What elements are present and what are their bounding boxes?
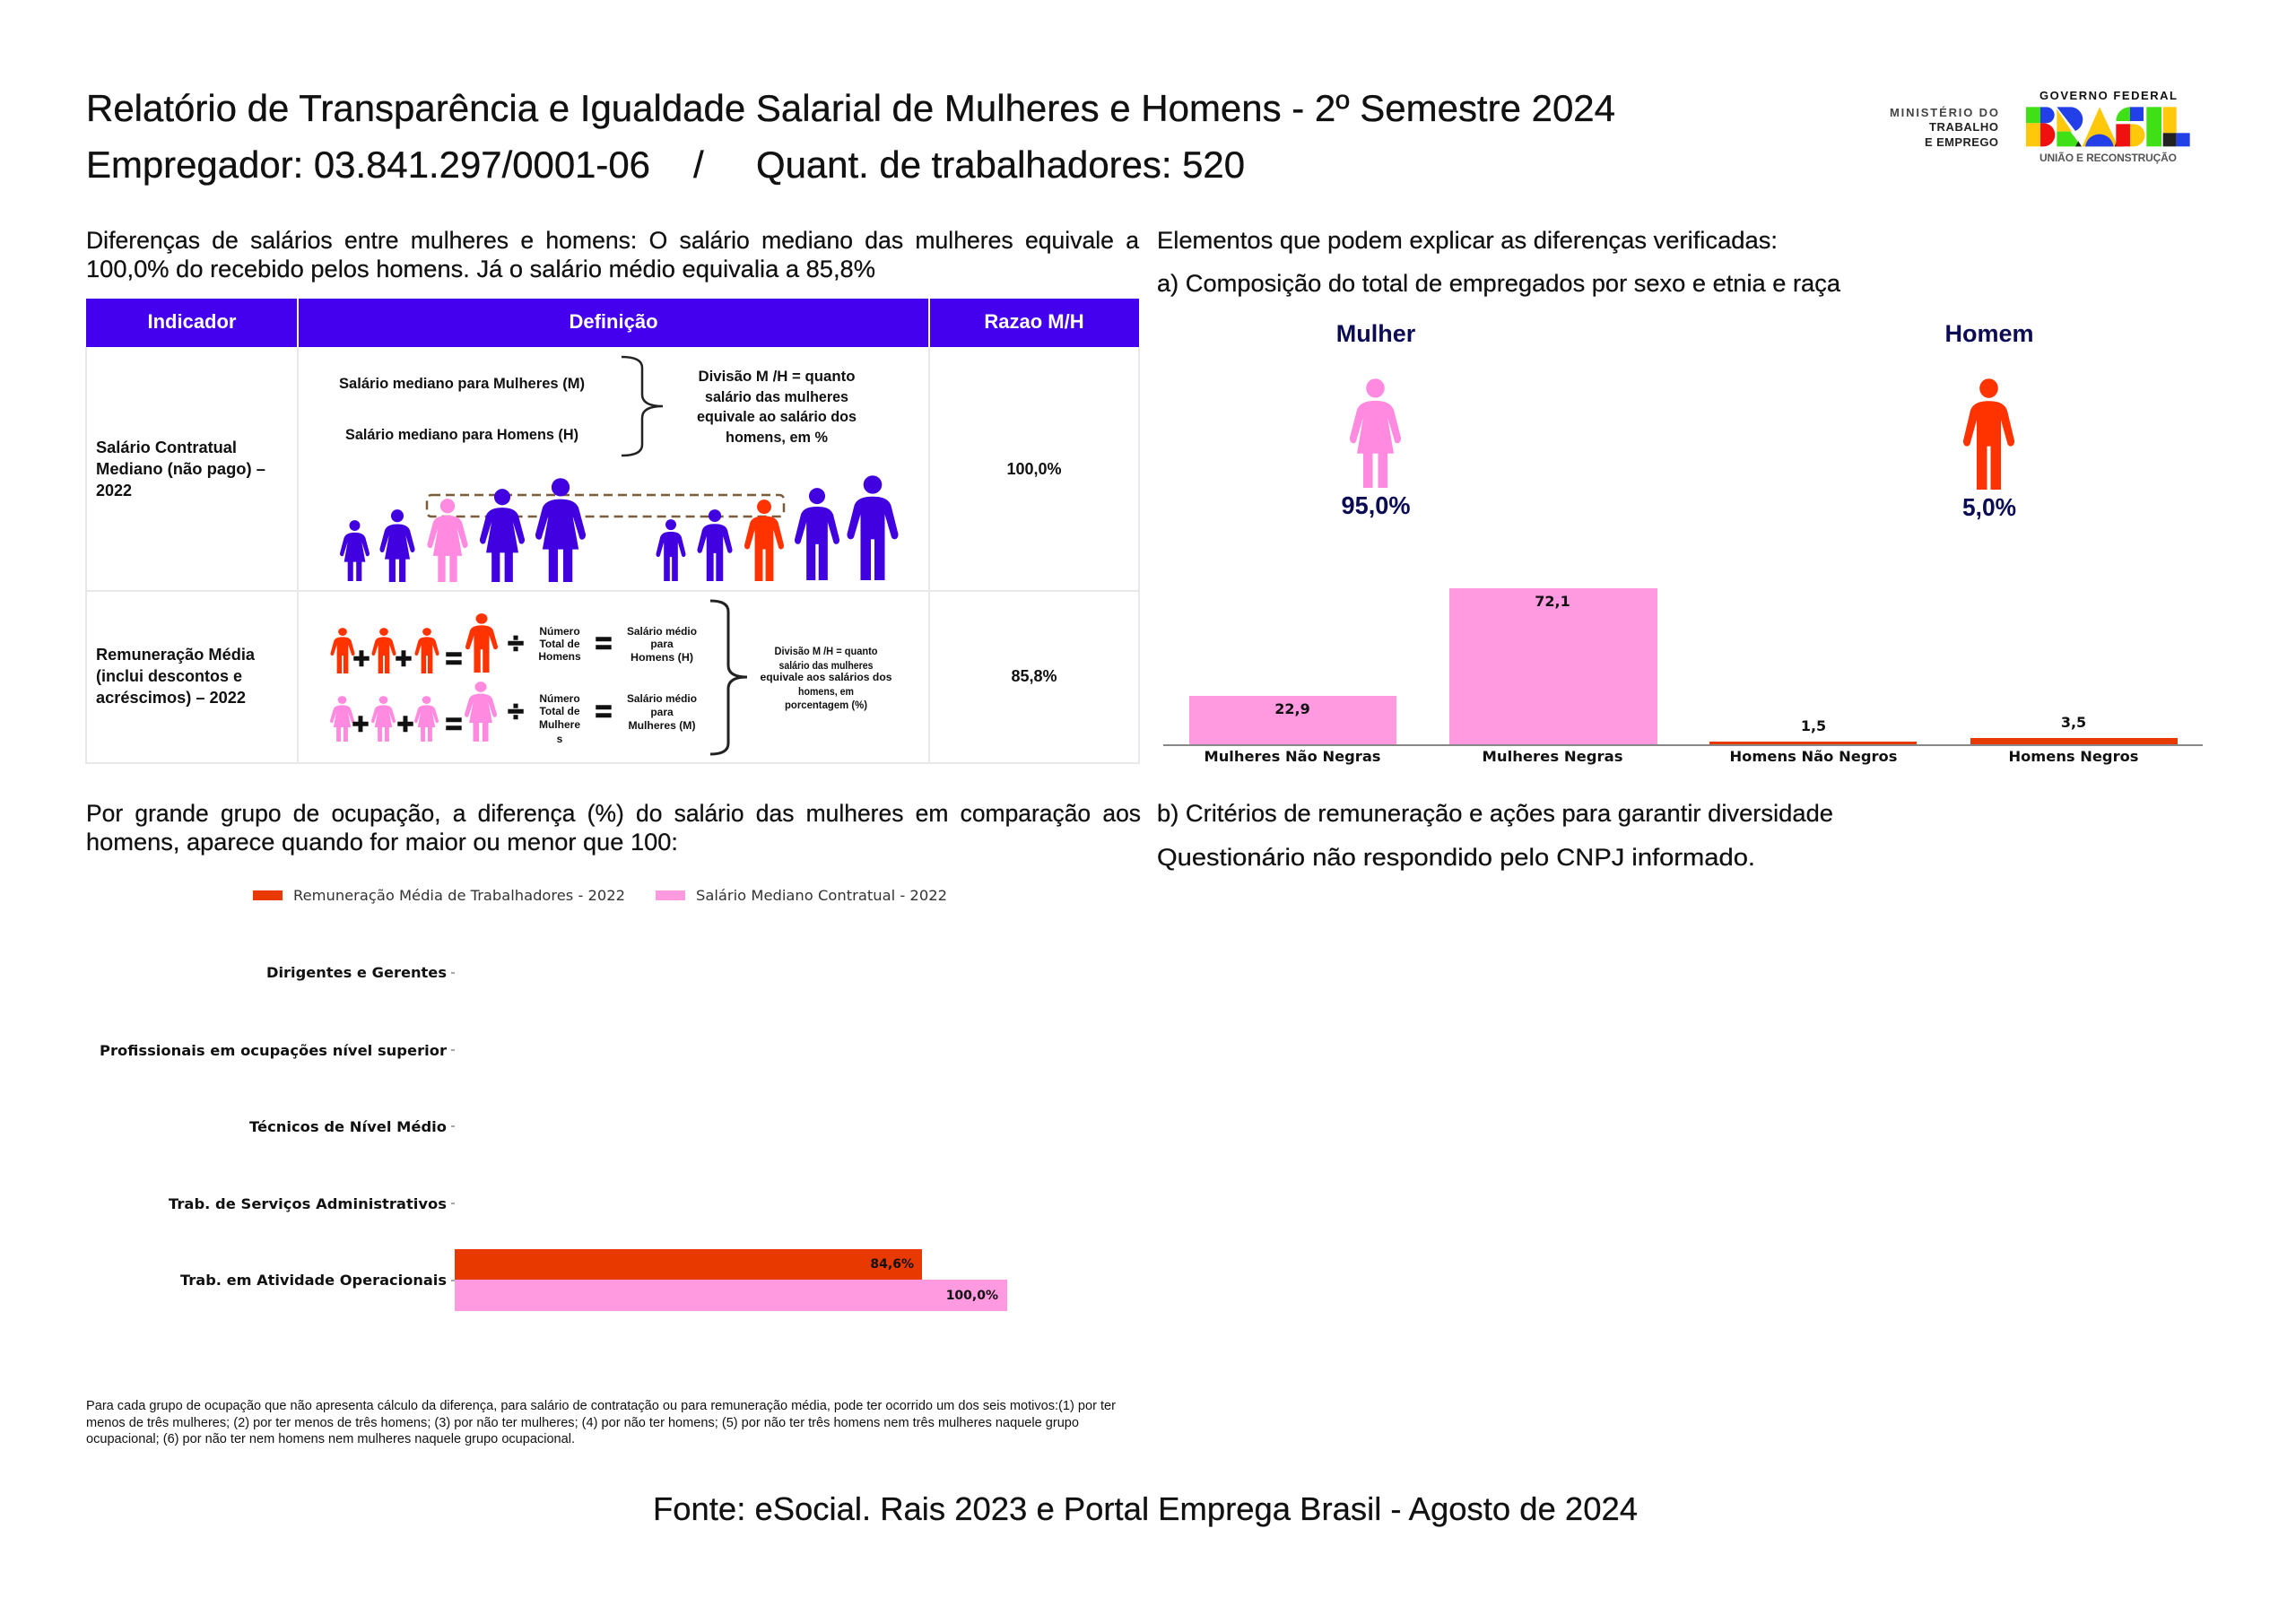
brace: average	[710, 601, 747, 754]
bar: mulheres não negras: 22,9	[1274, 700, 1310, 717]
ministry text: E EMPREGO	[1925, 135, 1998, 149]
legend: Remuneração Média de Trabalhadores - 2022	[293, 887, 625, 904]
brasil wordmark	[2026, 107, 2190, 146]
bar: salário mediano: 100,0%	[946, 1289, 998, 1303]
governo federal text: GOVERNO FEDERAL	[2039, 89, 2177, 102]
row label: remuneração média: acréscimos) – 2022	[96, 689, 246, 707]
bar: remuneração média: 84,6%	[870, 1257, 914, 1272]
ministry text: TRABALHO	[1929, 120, 1998, 134]
equation: women average: para	[650, 706, 674, 718]
equation: men average: Total de	[539, 638, 580, 650]
value: woman share: 95,0%	[1342, 491, 1411, 519]
equation: men average	[330, 613, 697, 674]
equation: women average: =	[446, 708, 462, 740]
definition: median division	[697, 368, 857, 446]
table header: Razao M/H	[984, 310, 1084, 333]
equation: men average: Homens	[538, 650, 581, 663]
equation: women average: Total de	[539, 705, 580, 717]
source: Fonte: eSocial. Rais 2023 e Portal Emprega Brasil - Agosto de 2024	[653, 1490, 1638, 1527]
employer line	[86, 143, 1245, 186]
legend: Salário Mediano Contratual - 2022	[696, 887, 947, 904]
text: salary differences	[86, 227, 1140, 282]
bar: homens não negros: 1,5	[1801, 717, 1826, 734]
definition: average division	[761, 645, 892, 711]
axis labels: Homens Não Negros	[1729, 748, 1898, 765]
definition: median text	[339, 375, 585, 443]
text: salary differences: 100,0% do recebido pelos homens. Já o salário médio equivalia a 85,8%	[86, 256, 875, 282]
equation: men average: ÷	[508, 627, 524, 659]
axis labels: Mulheres Negras	[1482, 748, 1623, 765]
equation: men average: Número	[539, 625, 580, 638]
icons: women by salary	[340, 478, 586, 582]
equation: men average: +	[396, 642, 412, 674]
category labels: Trab. em Atividade Operacionais	[180, 1272, 447, 1289]
brace: median	[622, 357, 663, 456]
definition: average division: Divisão M /H = quanto	[775, 645, 877, 657]
definition: median text: Salário mediano para Mulheres (M)	[339, 375, 585, 392]
equation: men average: para	[650, 638, 674, 650]
bar: homens negros: 3,5	[2061, 714, 2086, 731]
label: homem: Homem	[1944, 320, 2034, 347]
value: average ratio: 85,8%	[1011, 667, 1057, 685]
panel: man share	[1944, 320, 2034, 521]
employer line: /	[693, 143, 704, 186]
bar: mulheres negras: 72,1	[1535, 593, 1570, 610]
logo: ministério do trabalho e governo federal	[1890, 89, 2190, 164]
legend	[253, 887, 947, 904]
text: salary differences: Diferenças de salários entre mulheres e homens: O salário mediano das mulheres equivale a	[86, 227, 1140, 254]
equation: women average	[330, 682, 697, 745]
equation: women average: +	[397, 708, 413, 740]
ministry text: MINISTÉRIO DO	[1890, 106, 1998, 119]
equation: men average: Homens (H)	[631, 651, 693, 664]
table header: Definição	[569, 310, 658, 333]
text: occupational group difference: Por grande grupo de ocupação, a diferença (%) do salário das mulheres em comparação aos	[86, 800, 1141, 827]
axis	[1163, 744, 2203, 746]
value: man share: 5,0%	[1962, 493, 2016, 521]
bar: homens não negros	[1709, 717, 1917, 745]
icon: man	[1963, 378, 2014, 490]
footnote	[86, 1398, 1116, 1446]
equation: men average: +	[353, 642, 370, 674]
bar: mulheres negras	[1449, 588, 1657, 745]
definition: median division: Divisão M /H = quanto	[698, 368, 856, 385]
row label: salário contratual mediano: 2022	[96, 482, 132, 499]
row label: remuneração média: Remuneração Média	[96, 646, 256, 664]
row label: salário contratual mediano: Salário Contratual	[96, 439, 237, 456]
text: occupational group difference: homens, aparece quando for maior ou menor que 100:	[86, 829, 678, 855]
panel: woman share	[1336, 320, 1416, 519]
definition: average division: equivale aos salários dos	[761, 671, 892, 683]
value: median ratio: 100,0%	[1006, 460, 1062, 478]
employer line: Quant. de trabalhadores: 520	[756, 143, 1245, 186]
median highlight box	[427, 495, 784, 517]
equation: women average: ÷	[508, 695, 524, 727]
row label: remuneração média: (inclui descontos e	[96, 667, 242, 685]
ministry text	[1890, 106, 1998, 149]
title: Relatório de Transparência e Igualdade Salarial de Mulheres e Homens - 2º Semestre 2024	[86, 87, 1615, 129]
heading: composition: a) Composição do total de empregados por sexo e etnia e raça	[1157, 270, 1841, 297]
bar: remuneração média	[455, 1249, 922, 1280]
category labels: Profissionais em ocupações nível superior	[100, 1042, 447, 1059]
equation: women average: Número	[539, 692, 580, 705]
equation: men average: =	[596, 627, 612, 659]
equation: women average: Mulheres (M)	[628, 719, 696, 732]
axis labels: Homens Negros	[2009, 748, 2138, 765]
employer line: Empregador: 03.841.297/0001-06	[86, 143, 650, 186]
equation: women average: =	[596, 695, 612, 727]
equation: women average: Mulhere	[539, 718, 580, 731]
footnote: menos de três mulheres; (2) por ter menos de três homens; (3) por não ter mulheres; (4) por não ter homens; (5) por não ter três homens nem três mulheres naquele grupo	[86, 1415, 1079, 1430]
row label: remuneração média	[96, 646, 256, 707]
definition: average division: homens, em	[798, 685, 854, 698]
definition: average division: porcentagem (%)	[785, 699, 867, 711]
footnote: Para cada grupo de ocupação que não apresenta cálculo da diferença, para salário de contratação ou para remuneração média, pode ter ocorrido um dos seis motivos:(1) por ter	[86, 1398, 1116, 1413]
bar chart: composition by sex and race	[1163, 588, 2203, 765]
equation: women average: s	[557, 733, 563, 745]
bar: salário mediano	[455, 1280, 1007, 1311]
text: occupational group difference	[86, 800, 1141, 855]
category labels	[100, 964, 447, 1289]
axis labels: Mulheres Não Negras	[1204, 748, 1381, 765]
bar: mulheres não negras	[1189, 696, 1396, 745]
icon: woman	[1350, 378, 1401, 488]
row label: salário contratual mediano	[96, 439, 265, 499]
axis labels	[1204, 748, 2138, 765]
heading: explanatory elements: Elementos que podem explicar as diferenças verificadas:	[1157, 227, 1778, 254]
definition: median division: equivale ao salário dos	[697, 408, 857, 425]
category labels: Dirigentes e Gerentes	[266, 964, 447, 981]
bar: homens negros	[1970, 714, 2178, 745]
row label: salário contratual mediano: Mediano (não pago) –	[96, 460, 265, 478]
label: mulher: Mulher	[1336, 320, 1416, 347]
table header	[86, 299, 1139, 347]
equation: men average: =	[446, 642, 462, 674]
panel: indicator table	[86, 299, 1139, 763]
category labels: Técnicos de Nível Médio	[249, 1118, 447, 1135]
união e reconstrução text: UNIÃO E RECONSTRUÇÃO	[2039, 151, 2177, 164]
bar chart: occupation groups	[100, 964, 1007, 1311]
icons: men by salary	[656, 475, 899, 581]
heading: remuneration criteria: b) Critérios de remuneração e ações para garantir diversidade	[1157, 800, 1833, 827]
equation: women average: +	[352, 708, 369, 740]
equation: women average: Salário médio	[627, 692, 697, 705]
definition: average division: salário das mulheres	[778, 659, 874, 672]
definition: median division: salário das mulheres	[705, 388, 848, 405]
table header: Indicador	[147, 310, 237, 333]
equation: men average: Salário médio	[627, 625, 697, 638]
text: questionnaire status: Questionário não respondido pelo CNPJ informado.	[1157, 844, 1755, 871]
table grid	[86, 347, 1139, 763]
category labels: Trab. de Serviços Administrativos	[169, 1195, 447, 1212]
footnote: ocupacional; (6) por não ter nem homens nem mulheres naquele grupo ocupacional.	[86, 1431, 575, 1446]
definition: median text: Salário mediano para Homens (H)	[345, 426, 578, 443]
definition: median division: homens, em %	[726, 429, 828, 446]
